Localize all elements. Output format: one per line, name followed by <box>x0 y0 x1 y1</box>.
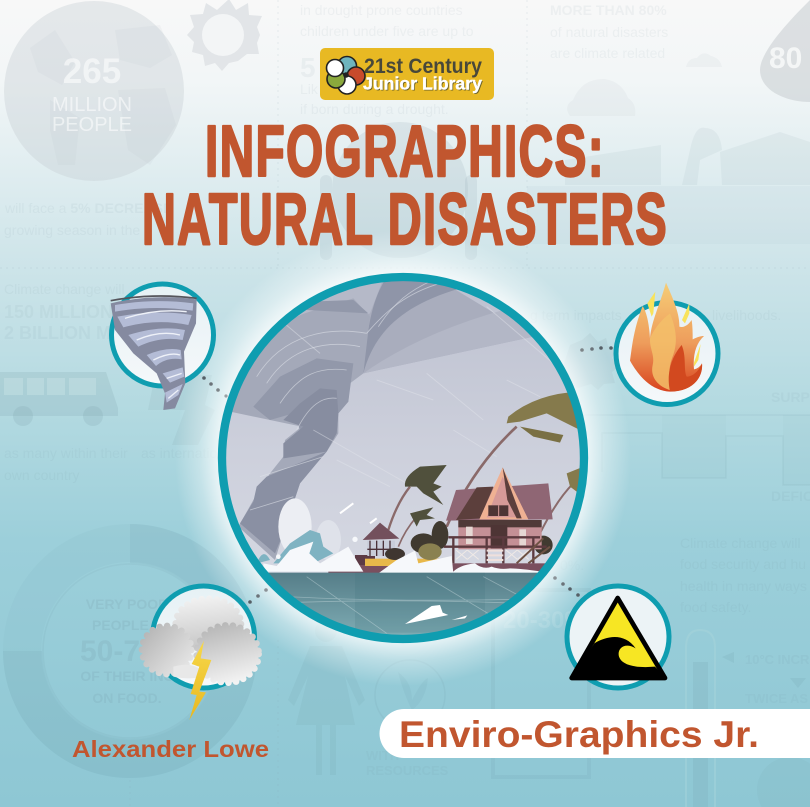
globe text: 265 <box>63 52 121 91</box>
title <box>142 112 668 260</box>
globe text: PEOPLE <box>52 114 132 136</box>
faded text columns: MORE THAN 80% <box>550 2 667 18</box>
icon: faded shape <box>148 375 215 445</box>
icon: faded sun <box>187 0 262 71</box>
scene ring <box>222 277 584 639</box>
faded text columns: of natural disasters <box>550 24 668 40</box>
faded text columns: as many within their <box>4 445 128 461</box>
faded text columns: 0%. <box>560 557 584 573</box>
donut text <box>80 596 174 706</box>
globe text <box>52 52 132 136</box>
sea <box>268 572 538 635</box>
donut text: VERY POOR <box>86 596 168 612</box>
logo <box>320 48 494 100</box>
icon: flower logo <box>326 56 365 94</box>
faded text columns: 5 <box>300 52 316 83</box>
faded step fill <box>662 415 810 485</box>
faded text columns: own country <box>4 467 79 483</box>
icon: faded flooded houses <box>565 128 810 185</box>
palm: left <box>388 465 447 547</box>
faded text columns: health in many ways <box>680 578 807 594</box>
icon: faded thermometer <box>686 630 806 807</box>
scene: storm over island <box>220 270 590 653</box>
icon: storm cloud <box>142 586 259 720</box>
series name: Enviro-Graphics Jr. <box>399 714 759 755</box>
left cloud <box>142 626 191 674</box>
logo: Junior Library <box>363 74 482 94</box>
faded step chart <box>530 415 810 485</box>
icon: tornado <box>111 284 214 410</box>
donut text: 50-7 <box>80 635 140 668</box>
palm: tall right <box>447 392 583 533</box>
globe text: MILLION <box>52 94 132 116</box>
logo: Junior Library <box>364 74 483 94</box>
faded text columns: WITH <box>366 748 399 763</box>
connector dots <box>202 346 613 604</box>
faded text columns: 10°C INCR <box>745 652 810 667</box>
tornado body <box>230 280 440 560</box>
icon: faded donut <box>3 524 257 778</box>
faded text columns: food safety. <box>680 599 751 615</box>
icon: faded bus <box>0 372 118 426</box>
hut <box>328 523 442 574</box>
foam <box>405 605 467 624</box>
icon: faded bacteria circle <box>757 757 810 807</box>
faded text columns: TWICE AS <box>745 691 808 706</box>
cloud join <box>173 665 207 678</box>
white waves <box>263 537 542 574</box>
faded text columns: Lik <box>300 81 319 97</box>
lightning <box>189 641 211 720</box>
faded text columns: food security and hu <box>680 556 806 572</box>
icon: faded bus windows <box>4 378 96 395</box>
author: Alexander Lowe <box>72 736 269 762</box>
faded text columns: 150 MILLION <box>4 302 113 322</box>
spray <box>257 498 377 563</box>
icon: tsunami warning <box>567 586 669 688</box>
icon: faded clouds <box>567 53 722 116</box>
icon: faded leaf circle <box>375 660 445 730</box>
faded text columns: as internatio <box>141 445 217 461</box>
faded text columns: 20-30% <box>503 607 586 634</box>
right cloud <box>197 625 259 683</box>
faded text columns: Climate change will <box>680 535 801 551</box>
rain streaks <box>286 306 552 486</box>
title: INFOGRAPHICS: <box>205 112 605 192</box>
faded text columns: livelihoods. <box>712 307 781 323</box>
icon: faded drop <box>760 0 810 102</box>
faded text columns: if born during a drought. <box>300 101 449 117</box>
storm funnel top <box>298 281 532 374</box>
faded text columns: in drought prone countries <box>300 2 463 18</box>
glow behind scene <box>175 230 631 686</box>
faded water band <box>527 186 810 244</box>
icon: faded woman <box>288 620 365 775</box>
faded text columns: growing season in the <box>4 222 140 238</box>
back cloud <box>176 599 241 649</box>
icon: faded globe <box>4 1 184 181</box>
faded text columns: children under five are up to <box>300 23 474 39</box>
faded text columns: Climate change will <box>4 281 125 297</box>
donut text: OF THEIR INC <box>80 668 174 684</box>
faded text columns: 2 BILLION M <box>4 323 111 343</box>
faded text columns: RESOURCES <box>366 763 449 778</box>
house <box>444 468 553 572</box>
series banner <box>380 709 810 758</box>
icon: faded frame <box>493 590 589 777</box>
faded text columns: g term impacts <box>530 307 622 323</box>
icon: faded magnifier <box>320 122 477 260</box>
donut text: ON FOOD. <box>92 690 162 706</box>
icon: faded gear <box>560 333 620 390</box>
faded text columns: will face a 5% DECREASE <box>4 200 172 216</box>
logo text: 21st Century <box>364 54 482 78</box>
faded text columns: are climate related <box>550 45 665 61</box>
bushes <box>411 521 553 560</box>
icon: flame <box>616 283 718 404</box>
donut text: PEOPLE S <box>92 617 162 633</box>
drop text: 80 <box>769 42 802 75</box>
sky <box>226 290 580 573</box>
sea highlights <box>294 576 516 634</box>
